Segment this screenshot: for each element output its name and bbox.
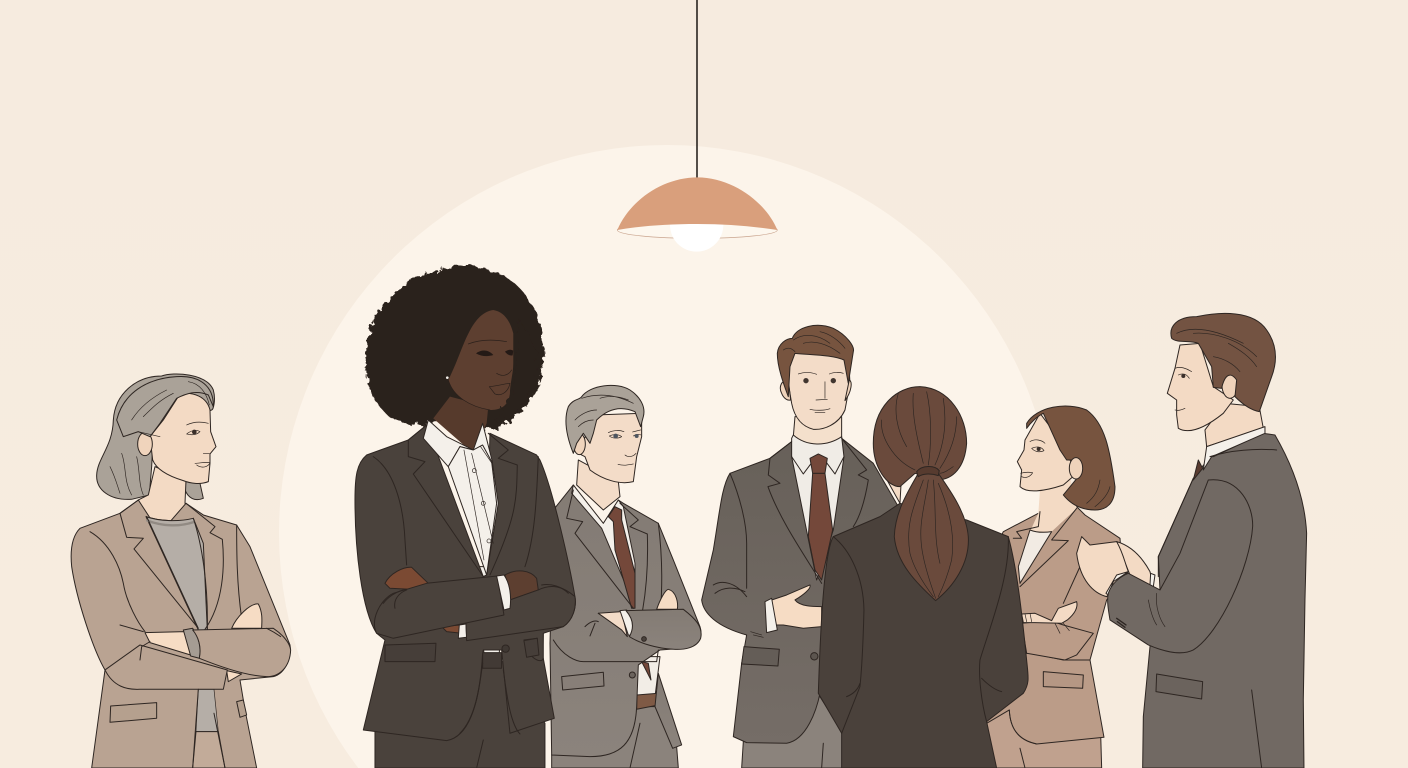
- person: man in profile at right: [1077, 313, 1307, 768]
- person: woman with afro in dark suit: [355, 267, 575, 768]
- pendant lamp: [617, 0, 777, 252]
- light circle: [279, 145, 1055, 768]
- person: woman with brown bob in tan suit: [980, 406, 1123, 768]
- person: silver-haired man in grey suit: [550, 385, 701, 768]
- person: man in centre with brown tie: [702, 325, 898, 768]
- person: grey-haired woman in tan blazer: [71, 374, 291, 768]
- person: woman seen from behind with ponytail: [818, 387, 1028, 768]
